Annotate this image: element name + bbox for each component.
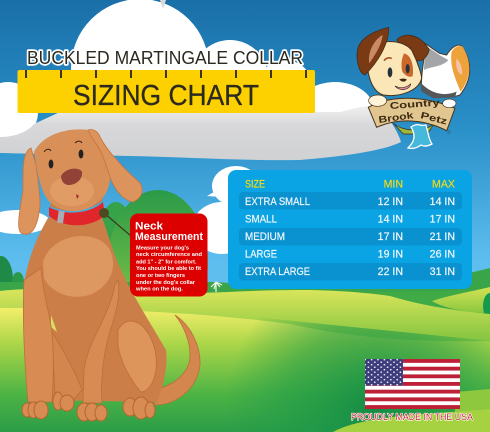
body [23,212,167,402]
logo text: Petz [419,110,448,128]
heading: sizing chart: SIZING CHART [73,80,259,112]
callout body: Measure your dog's [136,245,189,251]
table header: MIN [384,178,403,190]
tail [150,315,200,405]
eyes [49,160,53,168]
haunch [118,321,156,392]
table rows: 26 IN [430,249,455,261]
logo text: Brook [378,110,415,126]
callout body: under the dog's collar [136,280,196,286]
table rows: LARGE [245,249,277,261]
table rows: 12 IN [378,196,403,208]
gap between the legs [51,315,57,332]
nose [61,169,82,185]
head [34,129,110,211]
table rows: 31 IN [430,266,455,278]
table rows: 21 IN [430,231,455,243]
left ear [19,148,40,234]
leader line [104,213,131,236]
icon: cat mascot [420,43,470,98]
illustration: seated dog [19,129,200,421]
caption: made in the USA: PROUDLY MADE IN THE USA [351,412,474,423]
table rows: 14 IN [430,196,455,208]
background: hills and meadow [0,190,490,432]
callout body: one or two fingers [136,273,185,279]
table rows: 19 IN [378,249,403,261]
table rows: 17 IN [430,214,455,226]
callout heading: Neck [135,220,164,232]
front left leg [23,268,53,402]
icon: water splash [408,125,432,148]
collar [49,202,105,225]
size table [228,170,472,289]
paws [22,392,155,421]
row bands [239,192,462,280]
table header [245,178,455,190]
table rows: EXTRA SMALL [245,196,310,208]
callout heading: Measurement [135,231,203,243]
logo text: Country [389,97,441,112]
chest [43,236,113,297]
icon: American flag [365,359,460,409]
table rows: 22 IN [378,266,403,278]
table header: MAX [432,178,455,190]
callout body: neck circumference and [136,252,202,258]
table rows: SMALL [245,214,277,226]
background: clouds [0,0,401,254]
right ear [88,130,142,202]
table rows [245,196,455,278]
table rows: MEDIUM [245,231,285,243]
callout panel [130,214,208,296]
logo: Country Brook Petz [357,27,470,148]
small palm near the callout [211,282,222,292]
registered mark: ® [447,129,451,136]
icon: puppy mascot [357,27,429,96]
table rows: 17 IN [378,231,403,243]
logo text [378,97,448,128]
table panel [228,170,472,289]
callout body [135,245,202,293]
icon: name banner [368,95,456,134]
callout body: add 1" - 2" for comfort. [136,259,197,265]
table rows: EXTRA LARGE [245,266,310,278]
rear left leg [52,332,82,402]
muzzle [50,176,94,206]
callout body: You should be able to fit [136,266,201,272]
callout: neck measurement [99,208,208,296]
front right leg [83,280,119,403]
callout body: when on the dog. [135,287,183,293]
heading: product name: BUCKLED MARTINGALE COLLAR [27,48,303,68]
neck [50,180,103,211]
table rows: 14 IN [378,214,403,226]
ruler banner [18,70,315,113]
table header: SIZE [245,178,265,190]
